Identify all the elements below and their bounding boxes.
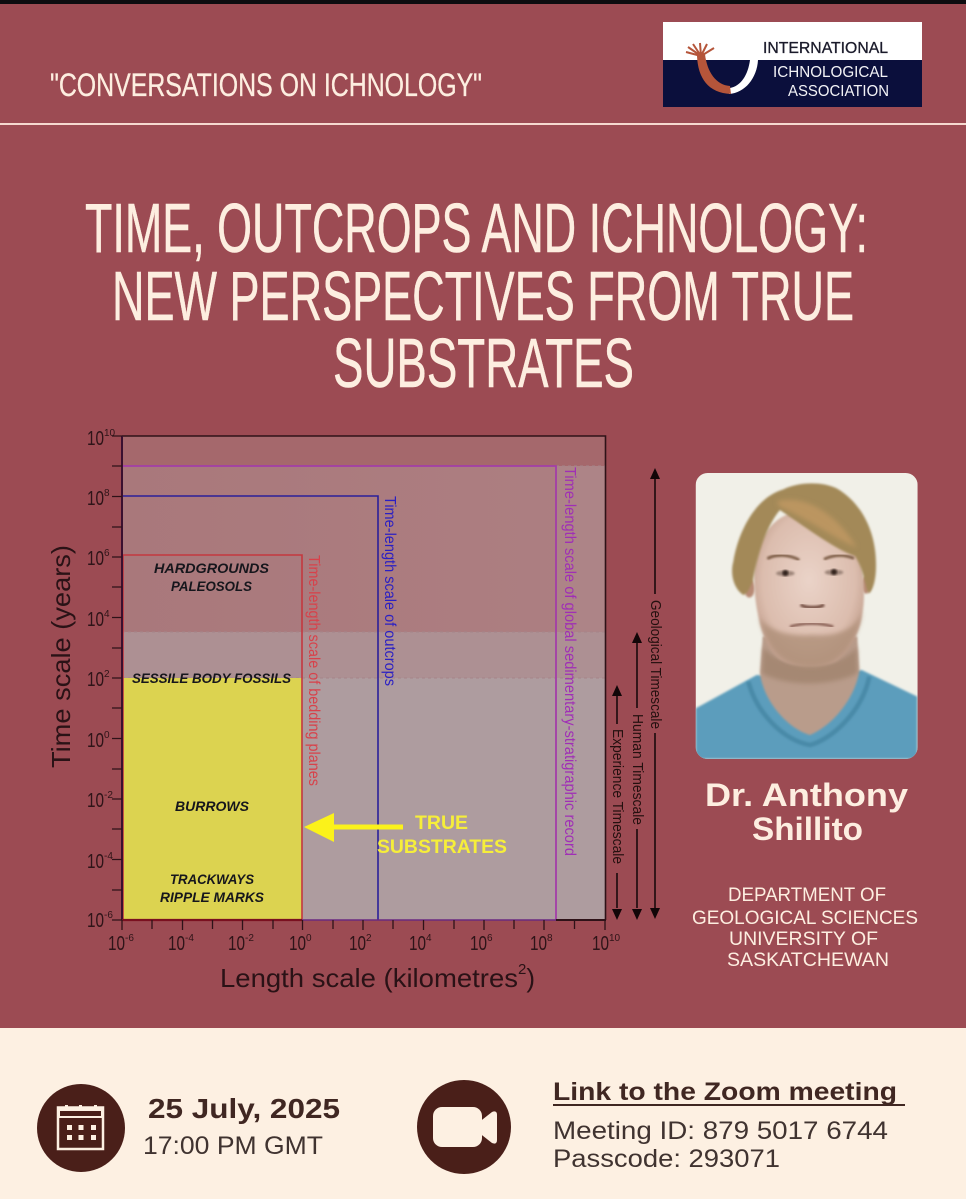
label: true substrates: SUBSTRATES <box>377 836 507 858</box>
axes and ticks <box>112 436 606 930</box>
x axis tick labels: 10 <box>108 933 125 955</box>
y axis tick labels: 10 <box>87 669 104 691</box>
hair <box>732 483 876 595</box>
y axis tick labels: -4 <box>104 851 113 862</box>
feature labels: BURROWS <box>175 798 250 814</box>
plot background bands <box>122 436 606 920</box>
shirt <box>696 670 917 759</box>
feature labels: HARDGROUNDS <box>154 560 270 576</box>
x axis tick labels: 10 <box>349 933 366 955</box>
logo text <box>763 40 889 100</box>
moustache <box>800 609 824 625</box>
x axis tick labels <box>108 933 621 955</box>
hair highlight <box>777 500 857 547</box>
y axis tick labels: 0 <box>104 730 110 741</box>
arrow: experience timescale <box>609 685 626 920</box>
x axis tick labels: -4 <box>185 933 194 944</box>
face <box>754 510 864 666</box>
speaker portrait <box>696 473 918 759</box>
arrow: human timescale: Human Timescale <box>629 714 646 825</box>
speaker name <box>705 777 908 847</box>
y axis tick labels: 6 <box>104 548 110 559</box>
y axis tick labels: -6 <box>104 910 113 921</box>
x axis tick labels: 10 <box>609 933 621 944</box>
logo text: INTERNATIONAL <box>763 40 888 57</box>
y axis tick labels: 10 <box>87 851 104 873</box>
speaker name: Shillito <box>752 811 863 847</box>
x axis tick labels: -2 <box>245 933 254 944</box>
rotated scale labels: Time-length scale of bedding planes <box>305 555 322 786</box>
icon: U-shaped burrow <box>686 43 758 94</box>
arrow: true substrates <box>304 813 403 842</box>
x axis tick labels: 10 <box>592 933 609 955</box>
y axis tick labels: 10 <box>104 428 116 439</box>
y axis tick labels: 10 <box>87 910 104 932</box>
x axis tick labels: 10 <box>530 933 547 955</box>
speaker affiliation: SASKATCHEWAN <box>727 950 889 971</box>
x axis title: Length scale (kilometres <box>220 963 518 993</box>
logo: International Ichnological Association <box>663 22 922 107</box>
nose <box>801 605 824 607</box>
meeting details <box>553 1117 888 1173</box>
y axis tick labels: 4 <box>104 609 110 620</box>
x axis tick labels: 10 <box>228 933 245 955</box>
chart: time scale vs length scale <box>46 428 664 993</box>
x axis tick labels: 2 <box>366 933 372 944</box>
meeting details: Passcode: 293071 <box>553 1145 780 1173</box>
feature labels: RIPPLE MARKS <box>160 889 265 905</box>
y axis tick labels <box>87 428 116 932</box>
y axis title: Time scale (years) <box>46 545 76 768</box>
logo text: ICHNOLOGICAL <box>773 64 888 81</box>
rotated scale labels <box>305 467 578 856</box>
stubble <box>759 610 863 667</box>
y axis tick labels: 10 <box>87 488 104 510</box>
x axis tick labels: 10 <box>168 933 185 955</box>
timescale arrows <box>609 468 664 920</box>
scale box: global record <box>122 466 556 920</box>
ears <box>744 579 755 598</box>
meeting details: Meeting ID: 879 5017 6744 <box>553 1117 888 1145</box>
arrow: human timescale <box>629 632 646 920</box>
y axis tick labels: 10 <box>87 548 104 570</box>
icon: video camera <box>417 1080 511 1174</box>
y axis tick labels: -2 <box>104 790 113 801</box>
event time: 17:00 PM GMT <box>143 1132 323 1160</box>
y axis tick labels: 10 <box>87 790 104 812</box>
feature labels: SESSILE BODY FOSSILS <box>132 670 292 686</box>
zoom link heading: Link to the Zoom meeting <box>553 1078 897 1106</box>
x axis tick labels: 10 <box>409 933 426 955</box>
feature labels: TRACKWAYS <box>170 871 255 887</box>
x axis tick labels: 4 <box>426 933 432 944</box>
neck <box>760 637 859 735</box>
x axis tick labels: 8 <box>547 933 553 944</box>
logo text: ASSOCIATION <box>788 83 889 100</box>
rotated scale labels: Time-length scale of global sedimentary-stratigraphic record <box>561 467 578 856</box>
feature labels <box>132 560 292 905</box>
speaker affiliation: GEOLOGICAL SCIENCES <box>692 908 918 929</box>
scale box: bedding planes <box>123 555 302 920</box>
series heading: "CONVERSATIONS ON ICHNOLOGY" <box>50 67 482 103</box>
arrow: experience timescale: Experience Timescale <box>609 729 626 864</box>
feature labels: PALEOSOLS <box>171 578 253 594</box>
y axis tick labels: 10 <box>87 428 104 450</box>
main title <box>85 189 868 402</box>
eyes <box>776 571 795 576</box>
label: true substrates: TRUE <box>415 812 468 834</box>
x axis title: 2 <box>518 961 526 978</box>
yellow true substrates block <box>123 678 302 920</box>
x axis tick labels: 0 <box>306 933 312 944</box>
speaker affiliation: UNIVERSITY OF <box>729 929 878 950</box>
event date: 25 July, 2025 <box>148 1093 340 1124</box>
icon: calendar <box>37 1084 125 1172</box>
speaker name: Dr. Anthony <box>705 777 908 813</box>
mouth <box>790 624 833 627</box>
x axis tick labels: 10 <box>470 933 487 955</box>
x axis tick labels: -6 <box>125 933 134 944</box>
label: true substrates <box>377 812 507 858</box>
x axis tick labels: 10 <box>289 933 306 955</box>
y axis tick labels: 10 <box>87 609 104 631</box>
speaker affiliation: DEPARTMENT OF <box>728 885 886 906</box>
speaker affiliation <box>692 885 918 971</box>
neck shadow under jaw <box>762 647 857 683</box>
arrow: geological timescale <box>647 468 664 919</box>
y axis tick labels: 8 <box>104 488 110 499</box>
brows <box>767 555 854 560</box>
y axis tick labels: 2 <box>104 669 110 680</box>
arrow: geological timescale: Geological Timescale <box>647 600 664 729</box>
scale box: outcrops <box>122 496 378 920</box>
y axis tick labels: 10 <box>87 730 104 752</box>
panel: event details <box>0 1028 966 1199</box>
x axis tick labels: 6 <box>487 933 493 944</box>
rotated scale labels: Time-length scale of outcrops <box>381 496 398 686</box>
main title: SUBSTRATES <box>333 324 634 402</box>
x axis title: ) <box>526 963 535 993</box>
